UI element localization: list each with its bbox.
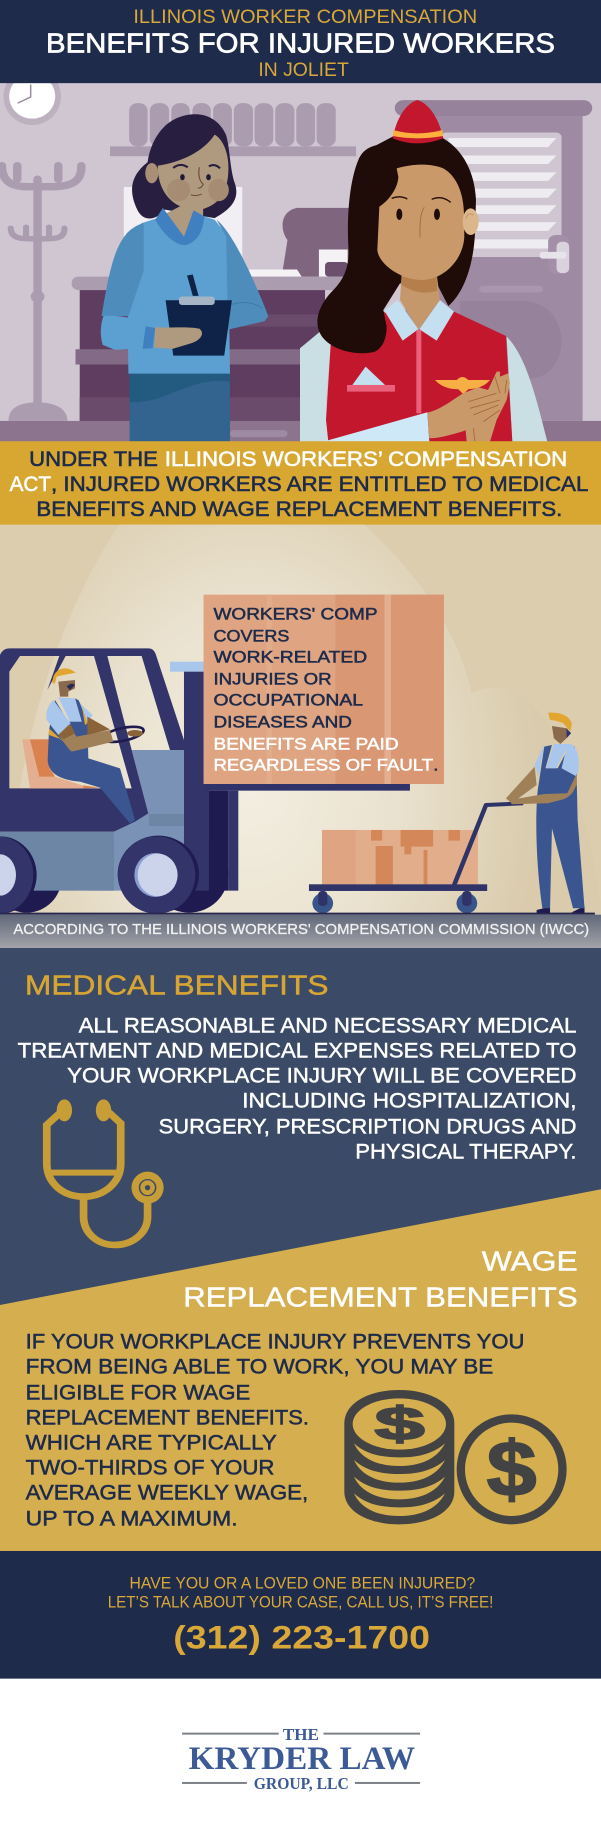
icon: wall clock — [3, 68, 61, 125]
illustration: forklift driver — [22, 668, 145, 823]
illustration: forklift — [0, 648, 410, 914]
panel: act summary band — [0, 441, 601, 526]
wage benefits text: ELIGIBLE FOR WAGE — [26, 1380, 250, 1404]
callout text — [213, 604, 439, 774]
icon: coin stack: $ — [375, 1397, 425, 1449]
panel: title header — [0, 0, 601, 83]
logo: The Kryder Law Group: GROUP, LLC — [254, 1774, 349, 1793]
title location: IN JOLIET — [258, 59, 349, 81]
panel: medical benefits background — [0, 948, 601, 1306]
illustration: warehouse worker — [506, 713, 585, 913]
logo: The Kryder Law Group: THE — [283, 1725, 319, 1744]
phone number: (312) 223-1700 — [173, 1620, 430, 1656]
icon: dollar coin — [457, 1414, 567, 1524]
panel: wage text, call to action and logo — [0, 1329, 601, 1793]
warehouse background — [0, 525, 601, 915]
panel: act summary band: ACT — [10, 471, 51, 496]
wage benefits text: REPLACEMENT BENEFITS. — [26, 1405, 309, 1429]
panel: office background — [0, 68, 601, 442]
illustration: woman with clipboard — [101, 114, 268, 442]
title: BENEFITS FOR INJURED WORKERS — [46, 29, 555, 59]
panel: act summary band: BENEFITS AND WAGE REPLACEMENT BENEFITS. — [36, 496, 562, 521]
panel: call to action — [0, 1551, 601, 1679]
callout text: . — [433, 755, 439, 774]
medical benefits text: PHYSICAL THERAPY. — [355, 1139, 576, 1163]
door and window blinds — [395, 100, 592, 421]
icon: coin stack — [344, 1390, 454, 1524]
heading: wage replacement benefits — [183, 1247, 578, 1313]
illustration: hand cart with boxes — [309, 803, 523, 913]
shelf with binders — [110, 103, 356, 156]
panel: office illustration and header — [0, 0, 601, 526]
illustration: woman in red uniform — [300, 100, 547, 442]
reception desk and computer — [0, 187, 601, 442]
illustration: cardboard box callout — [204, 595, 444, 784]
panel: act summary band: ILLINOIS WORKERS’ COMPENSATION — [165, 446, 567, 471]
panel: call to action: HAVE YOU OR A LOVED ONE BEEN INJURED? — [130, 1573, 475, 1592]
wage benefits text: IF YOUR WORKPLACE INJURY PREVENTS YOU — [26, 1329, 524, 1353]
panel: source attribution bar — [0, 913, 601, 948]
heading: medical benefits: MEDICAL BENEFITS — [25, 970, 328, 1001]
wage benefits text: TWO-THIRDS OF YOUR — [26, 1455, 274, 1479]
callout text: INJURIES OR — [213, 669, 332, 688]
title kicker: ILLINOIS WORKER COMPENSATION — [133, 6, 477, 28]
red hat — [393, 100, 443, 143]
wage benefits text: UP TO A MAXIMUM. — [26, 1506, 238, 1530]
callout text: WORK-RELATED — [213, 647, 367, 666]
icon: dollar coin: $ — [487, 1425, 537, 1513]
panel: forklift warehouse scene — [0, 525, 601, 948]
wage benefits text: FROM BEING ABLE TO WORK, YOU MAY BE — [26, 1354, 493, 1378]
panel: act summary band: UNDER THE — [29, 446, 158, 471]
coat rack — [2, 166, 81, 421]
callout text: COVERS — [213, 626, 289, 645]
panel: medical and wage benefits — [0, 948, 601, 1553]
medical benefits text: INCLUDING HOSPITALIZATION, — [242, 1088, 576, 1112]
wage benefits text: AVERAGE WEEKLY WAGE, — [26, 1480, 308, 1504]
logo: The Kryder Law Group — [182, 1725, 420, 1793]
wage benefits text: WHICH ARE TYPICALLY — [26, 1430, 277, 1454]
logo: The Kryder Law Group: KRYDER LAW — [189, 1740, 415, 1776]
wage benefits text — [26, 1329, 524, 1530]
panel: call to action: LET’S TALK ABOUT YOUR CASE, CALL US, IT’S FREE! — [108, 1592, 493, 1611]
forklift wheels — [0, 836, 199, 914]
icon: stethoscope — [47, 1099, 164, 1245]
medical benefits text — [18, 1013, 577, 1163]
panel: wage benefits background — [0, 1189, 601, 1553]
heading: wage replacement benefits: REPLACEMENT BENEFITS — [183, 1283, 578, 1313]
callout text: WORKERS' COMP — [213, 604, 378, 623]
callout text: DISEASES AND — [213, 712, 352, 731]
heading: wage replacement benefits: WAGE — [482, 1247, 578, 1277]
callout text: REGARDLESS OF FAULT — [213, 755, 433, 774]
callout text: BENEFITS ARE PAID — [213, 734, 399, 753]
callout text: OCCUPATIONAL — [213, 690, 363, 709]
